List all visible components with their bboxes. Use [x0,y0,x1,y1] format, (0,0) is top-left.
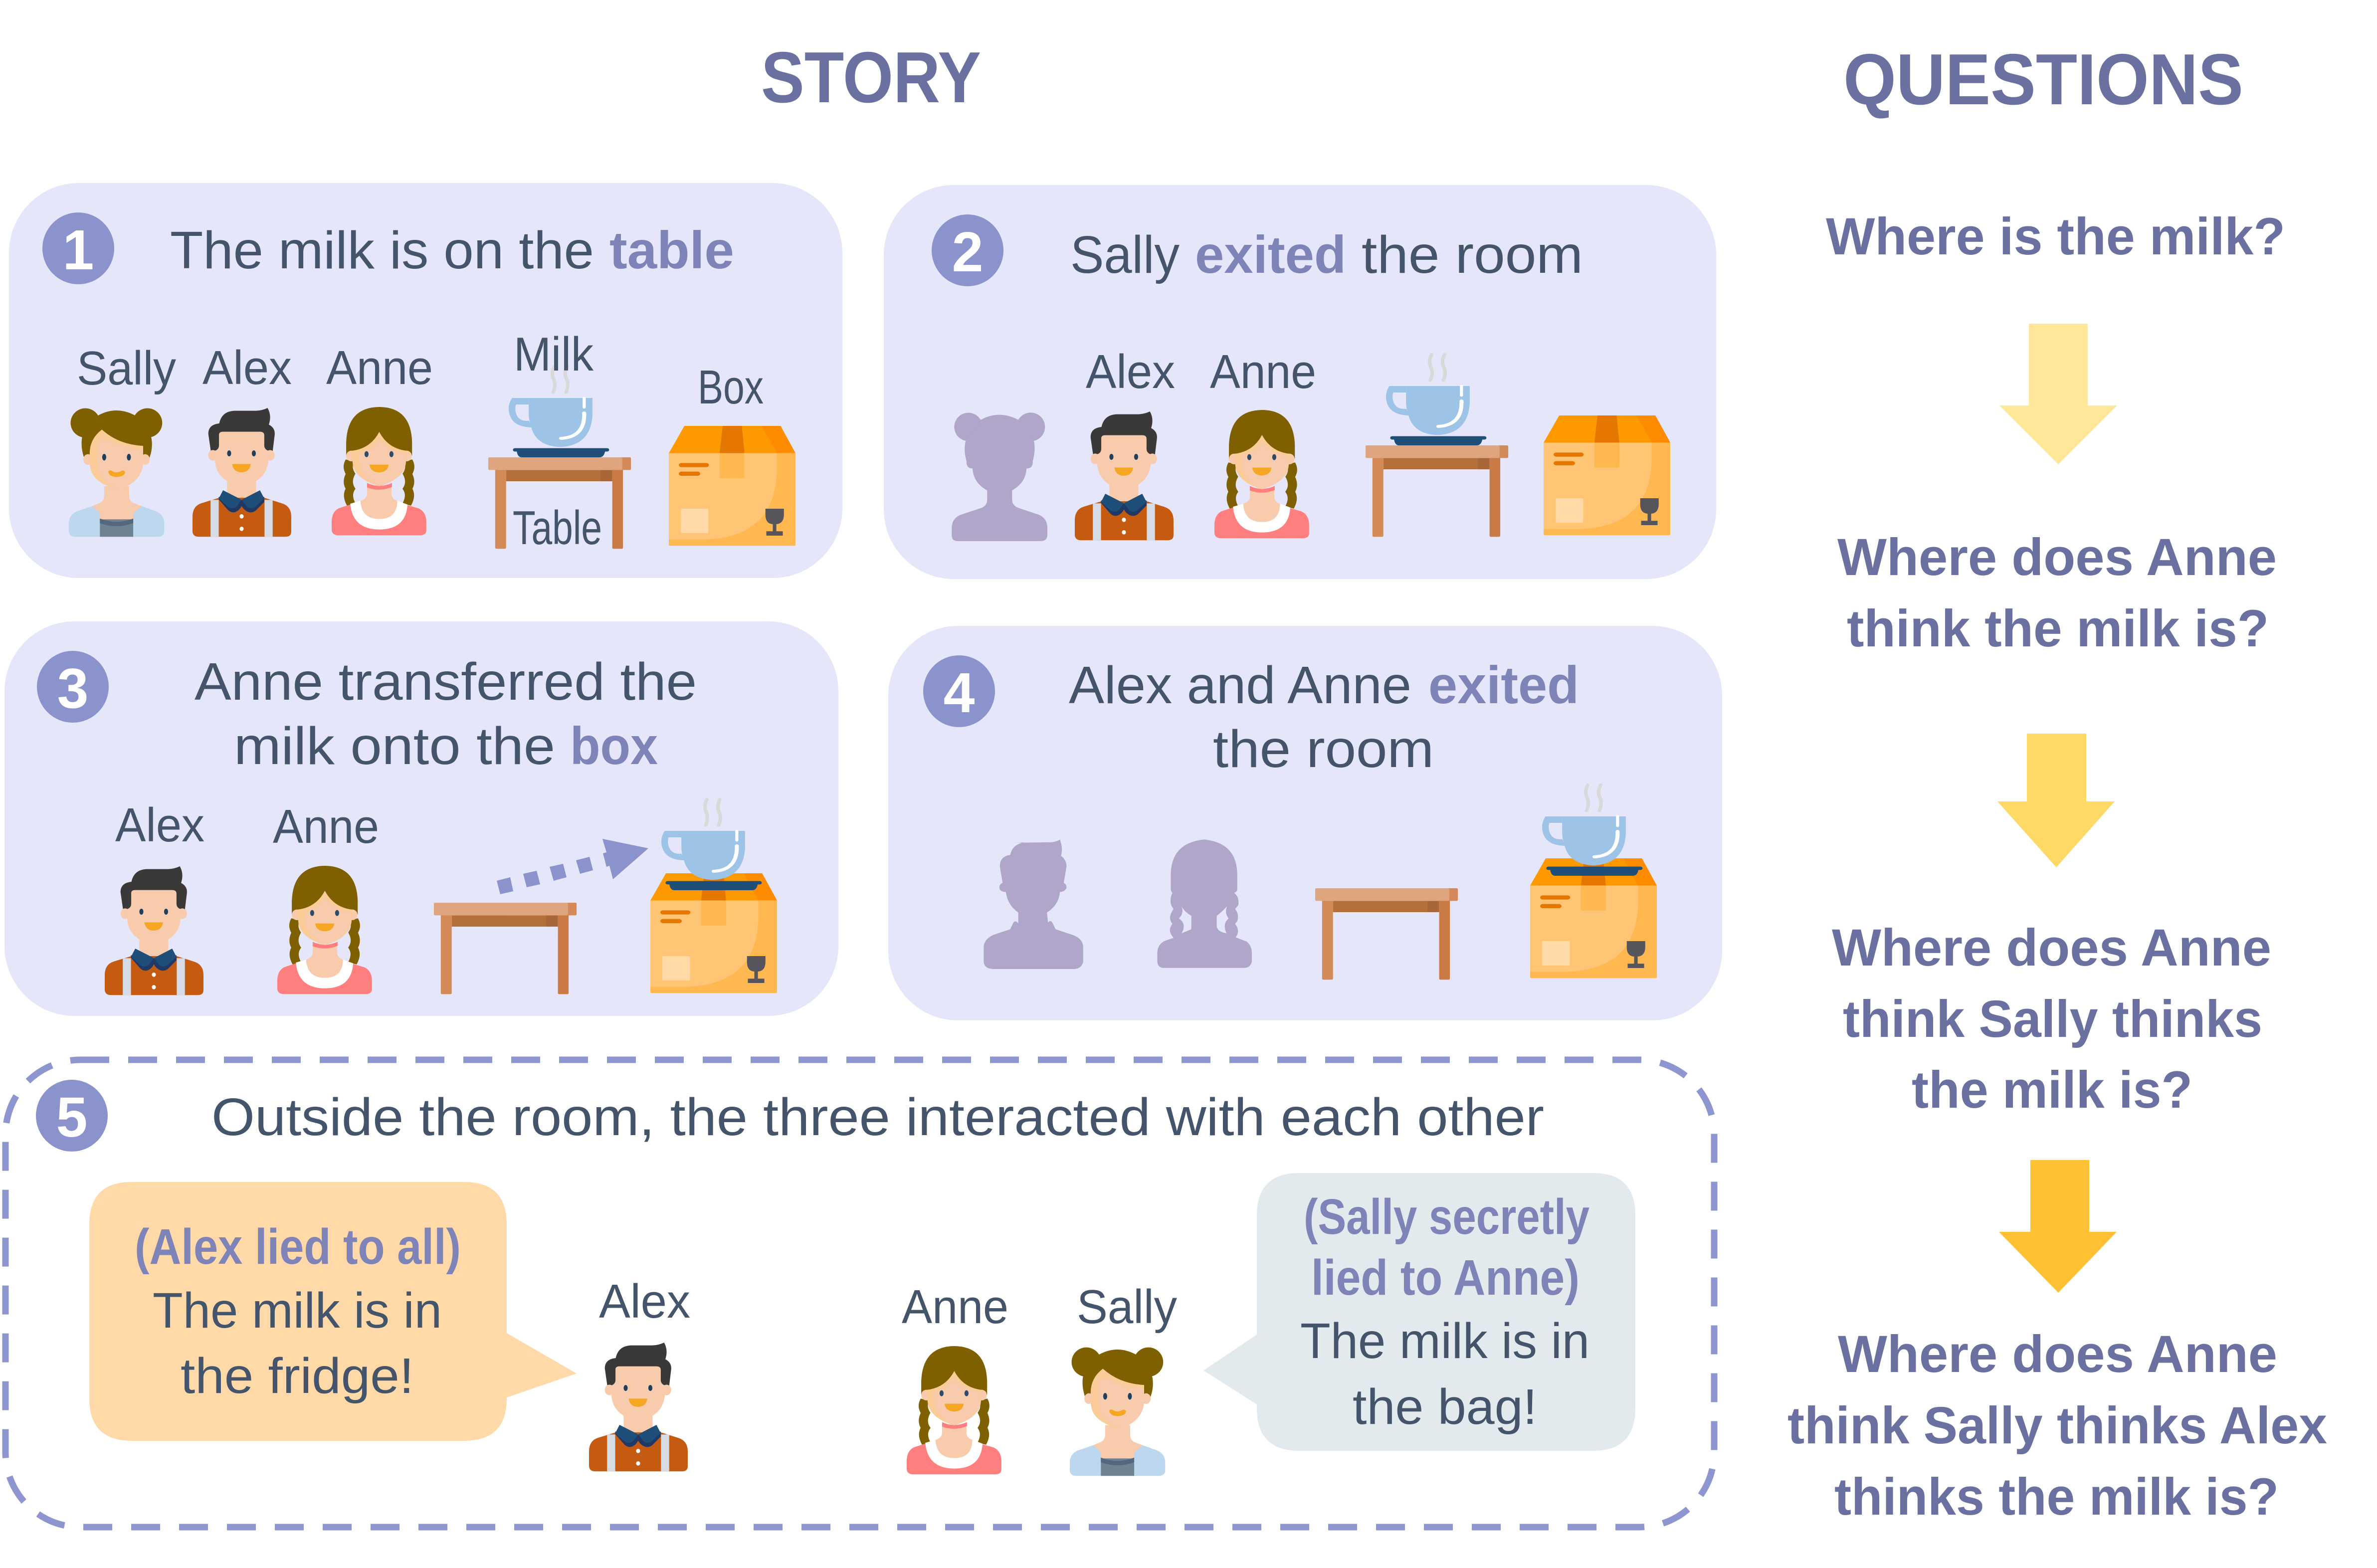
callout: Alex lied [89,1182,577,1441]
icon: Alex [1075,411,1174,540]
step number 3 [37,651,109,723]
question 2 [1837,528,2277,658]
icon: Sally [69,408,164,537]
label: Alex: Alex [202,341,292,394]
arrow 1 [1999,324,2117,464]
icon: milk cup [1386,355,1486,445]
panel 4: Alex and Anne exited [888,626,1722,1020]
title: questions: QUESTIONS [1843,39,2243,120]
icon: Sally silhouette [952,412,1047,541]
question 3: think Sally thinks [1843,990,2262,1048]
icon: table [1366,445,1508,537]
panel 3 heading: Anne transferred the [195,652,697,711]
panel 5 heading: Outside the room, the three interacted with each other [211,1088,1544,1147]
icon: Alex [193,408,291,537]
panel 3: Anne transferred the milk [4,621,838,1016]
panel 3 heading: box [570,717,658,776]
panel 2 heading: exited [1195,225,1346,284]
icon: box [1544,415,1670,535]
label: Alex: Alex [1086,345,1175,398]
callout: Sally lied: The milk is in [1300,1313,1589,1369]
label: Anne: Anne [902,1280,1008,1334]
step number 2 [932,214,1003,286]
panel 2 heading: the room [1362,225,1583,284]
title: story: STORY [761,37,981,118]
icon: box [650,873,777,993]
label: Milk: Milk [514,328,594,381]
icon: Anne [277,866,372,994]
panel 4 heading: exited [1428,656,1579,715]
label: Anne: Anne [326,341,433,394]
label: Sally: Sally [1077,1280,1177,1334]
question 2: Where does Anne [1837,528,2277,587]
icon: milk cup [661,799,762,890]
label: Anne: Anne [273,800,379,853]
label: Box: Box [698,361,764,414]
label: Anne: Anne [1210,345,1316,398]
icon: milk cup [509,367,609,457]
question 4: think Sally thinks Alex [1787,1396,2327,1455]
panel 2 heading [1070,225,1583,284]
step number 5: 5 [56,1086,87,1149]
callout: Sally lied: (Sally secretly [1304,1189,1589,1245]
panel 3 heading [195,652,697,776]
question 4: thinks the milk is? [1834,1468,2279,1526]
panel 4 heading: Alex and Anne [1069,656,1411,715]
question 4: Where does Anne [1838,1325,2277,1383]
icon: Sally [1070,1348,1165,1476]
icon: Anne [907,1346,1001,1474]
step number 5 [36,1080,108,1152]
icon: box [1530,858,1657,978]
label: Sally: Sally [77,342,176,395]
panel 4 heading: the room [1213,720,1434,779]
panel 1 heading: The milk is on the [170,221,594,280]
question 2: think the milk is? [1847,599,2269,658]
callout: Sally lied: lied to Anne) [1311,1250,1580,1306]
step number 4 [923,655,995,727]
label: Alex: Alex [115,798,204,852]
step number 1: 1 [63,218,94,281]
step number 2: 2 [952,220,983,283]
icon: Anne [332,407,426,535]
panel 1: milk on the table [9,183,842,578]
step number 3: 3 [57,657,88,720]
label: Table: Table [513,501,602,555]
callout: Sally lied: the bag! [1353,1379,1537,1435]
icon: Anne [1214,410,1309,538]
icon: Alex [589,1343,688,1471]
panel 2: Sally exited [884,185,1716,579]
icon: milk cup [1542,785,1642,876]
icon: Alex silhouette [984,839,1083,969]
panel 4 heading [1069,656,1579,779]
arrow 3 [1999,1160,2117,1293]
icon: Anne silhouette [1157,839,1252,968]
question 3 [1832,919,2271,1119]
callout: Alex lied: The milk is in [153,1283,442,1339]
panel 2 heading: Sally [1070,225,1180,284]
step number 1 [42,212,114,284]
panel 3 heading: milk onto the [234,717,555,776]
arrow 2 [1997,734,2115,867]
question 3: the milk is? [1912,1061,2192,1119]
step number 4: 4 [944,661,975,724]
label: Alex: Alex [599,1275,690,1328]
question 3: Where does Anne [1832,919,2271,977]
icon: box [669,426,795,546]
question 1: Where is the milk? [1826,207,2285,266]
icon: table [434,903,577,994]
callout: Alex lied: (Alex lied to all) [135,1219,461,1275]
icon: Alex [105,866,203,995]
question 4 [1787,1325,2327,1526]
callout: Sally lied [1203,1173,1635,1451]
icon: table [1315,888,1458,980]
icon: table [488,457,631,549]
panel 5: outside the room [5,1060,1714,1527]
callout: Alex lied: the fridge! [181,1348,414,1404]
panel 1 heading: table [609,221,734,280]
arrow: dashed transfer arrow [497,839,648,894]
